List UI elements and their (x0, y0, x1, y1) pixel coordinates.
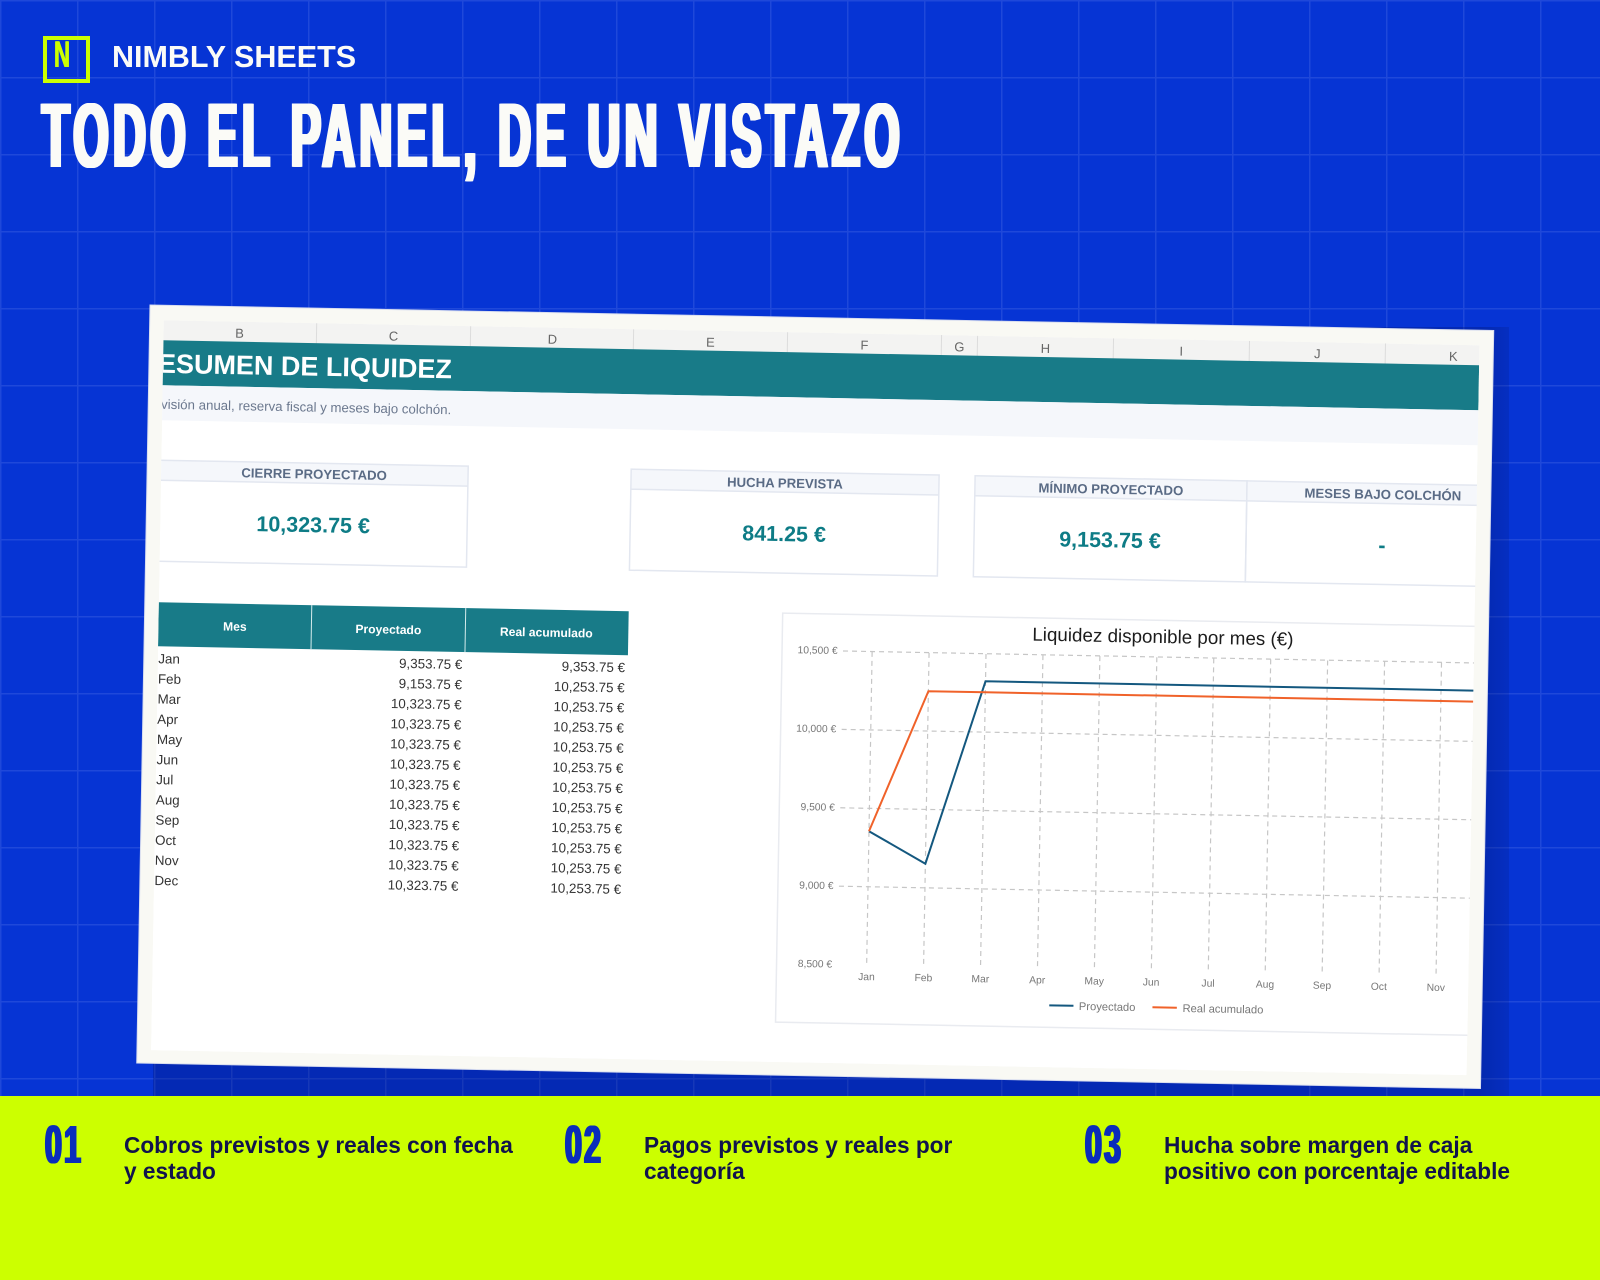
series: real acumulado (869, 690, 1473, 843)
feature 3 text: Hucha sobre margen de caja (1164, 1132, 1472, 1158)
table rows: 10,323.75 € (388, 837, 460, 853)
table rows (154, 651, 626, 897)
KPI card: hucha prevista: 841.25 € (742, 521, 826, 547)
table rows: 9,353.75 € (562, 659, 626, 675)
feature 3 text (1164, 1132, 1510, 1184)
table rows: 10,253.75 € (554, 679, 625, 695)
footer band (0, 1096, 1600, 1280)
table rows: 10,253.75 € (550, 881, 622, 897)
x axis labels: May (1084, 976, 1105, 988)
sheet subtitle band (140, 385, 1478, 445)
table header: Real acumulado (500, 625, 593, 641)
table rows: 10,253.75 € (553, 719, 625, 736)
table rows: 10,323.75 € (388, 877, 459, 894)
table rows: 10,323.75 € (390, 736, 462, 753)
KPI card: cierre proyectado (156, 460, 468, 567)
column header row: G (954, 339, 965, 354)
table header: Mes (223, 619, 247, 634)
KPI card: mínimo proyectado: MÍNIMO PROYECTADO (1038, 480, 1183, 498)
table rows: Mar (157, 692, 181, 707)
x axis labels: Mar (971, 974, 990, 985)
table rows: 10,253.75 € (553, 699, 625, 715)
feature 3 text: positivo con porcentaje editable (1164, 1158, 1510, 1184)
x axis labels: Oct (1371, 982, 1387, 993)
KPI card: meses bajo colchón (1245, 481, 1487, 586)
y axis labels: 8,500 € (798, 959, 833, 971)
feature 2 text (644, 1132, 952, 1184)
column header row: C (389, 329, 398, 344)
title: TODO EL PANEL, DE UN VISTAZO (42, 85, 904, 187)
x axis labels: Jul (1201, 979, 1215, 990)
feature 1 text: y estado (124, 1158, 216, 1184)
x axis labels: Aug (1256, 980, 1275, 991)
spreadsheet screenshot panel (136, 304, 1509, 1096)
feature 2 number: 02 (565, 1115, 603, 1175)
table rows: Jul (156, 772, 173, 788)
table rows: 10,253.75 € (552, 760, 624, 776)
x axis labels (858, 973, 1445, 991)
column header row: H (1041, 341, 1050, 356)
column header row: E (706, 335, 715, 350)
table rows: 10,323.75 € (388, 857, 459, 874)
x axis labels: Jan (858, 972, 875, 983)
feature 3 number: 03 (1085, 1115, 1123, 1175)
table rows: 10,253.75 € (552, 780, 624, 796)
chart legend: Real acumulado (1182, 1003, 1263, 1016)
monthly data table (154, 602, 629, 897)
table rows: 10,253.75 € (551, 820, 623, 836)
table header (158, 602, 629, 655)
column header row: D (548, 332, 557, 347)
KPI card: cierre proyectado: 10,323.75 € (256, 512, 370, 538)
series: proyectado (868, 679, 1473, 874)
table rows: 10,323.75 € (389, 817, 460, 833)
table rows: Aug (156, 792, 180, 808)
table rows: 10,323.75 € (390, 757, 461, 773)
feature 2 text: categoría (644, 1158, 745, 1184)
table rows: Apr (157, 712, 179, 727)
column header row (163, 320, 1479, 366)
chart legend (1049, 1002, 1263, 1014)
x axis labels: Nov (1427, 983, 1446, 994)
table rows: 10,323.75 € (391, 696, 462, 712)
brand name: NIMBLY SHEETS (112, 40, 356, 74)
table rows: 10,253.75 € (551, 840, 623, 857)
KPI card: hucha prevista (629, 469, 939, 576)
feature 1 text: Cobros previstos y reales con fecha (124, 1132, 513, 1158)
table rows: 10,323.75 € (389, 797, 461, 813)
line chart: liquidez disponible por mes (776, 613, 1493, 1036)
table rows: 9,353.75 € (399, 656, 463, 672)
y axis labels (796, 646, 838, 968)
table rows: Nov (155, 853, 179, 868)
x axis labels: Jun (1143, 977, 1160, 989)
column header row: F (860, 338, 869, 353)
table rows: May (157, 732, 183, 747)
sheet contents (126, 320, 1497, 1076)
table rows: 10,323.75 € (389, 777, 461, 793)
KPI card: mínimo proyectado (973, 476, 1247, 582)
x axis labels: Feb (914, 973, 933, 984)
table header: Proyectado (355, 622, 421, 637)
table rows: 10,323.75 € (390, 716, 462, 733)
column header row: I (1179, 344, 1183, 359)
table rows: Jan (158, 651, 180, 667)
feature 2 text: Pagos previstos y reales por (644, 1132, 952, 1158)
column header row: J (1314, 346, 1321, 361)
table rows: Sep (155, 812, 179, 828)
logo mark (43, 36, 90, 83)
y axis labels: 9,000 € (799, 881, 834, 892)
column header row: K (1449, 349, 1458, 364)
y axis labels: 10,000 € (796, 724, 837, 735)
x axis labels: Apr (1029, 975, 1046, 987)
table rows: 9,153.75 € (399, 676, 463, 692)
y axis labels: 10,500 € (797, 645, 838, 657)
panel drop shadow (153, 327, 1509, 1100)
chart title: Liquidez disponible por mes (€) (1032, 624, 1294, 650)
table rows: Feb (158, 671, 181, 687)
table rows: 10,253.75 € (552, 800, 623, 816)
KPI card: cierre proyectado: CIERRE PROYECTADO (241, 465, 387, 483)
KPI card: hucha prevista: HUCHA PREVISTA (727, 475, 843, 492)
KPI card: mínimo proyectado: 9,153.75 € (1059, 527, 1161, 553)
feature 1 text (124, 1132, 513, 1184)
feature 1 number: 01 (45, 1115, 83, 1175)
logo mark: N (54, 34, 70, 75)
x axis labels: Sep (1313, 981, 1331, 992)
sheet title band (138, 340, 1479, 410)
sheet frame (137, 305, 1494, 1089)
table rows: Dec (154, 873, 179, 888)
KPI card: meses bajo colchón: - (1378, 533, 1386, 558)
sheet title band: RESUMEN DE LIQUIDEZ (138, 348, 452, 384)
y axis labels: 9,500 € (800, 802, 835, 814)
KPI card: meses bajo colchón: MESES BAJO COLCHÓN (1304, 485, 1461, 503)
table rows: Jun (156, 752, 178, 767)
rotated sheet (126, 305, 1498, 1089)
table rows: Oct (155, 833, 176, 848)
column header row: B (235, 326, 244, 341)
table rows: 10,253.75 € (553, 739, 624, 756)
sheet subtitle band: Previsión anual, reserva fiscal y meses bajo colchón. (140, 396, 451, 417)
table rows: 10,253.75 € (551, 860, 622, 877)
chart legend: Proyectado (1079, 1001, 1136, 1014)
